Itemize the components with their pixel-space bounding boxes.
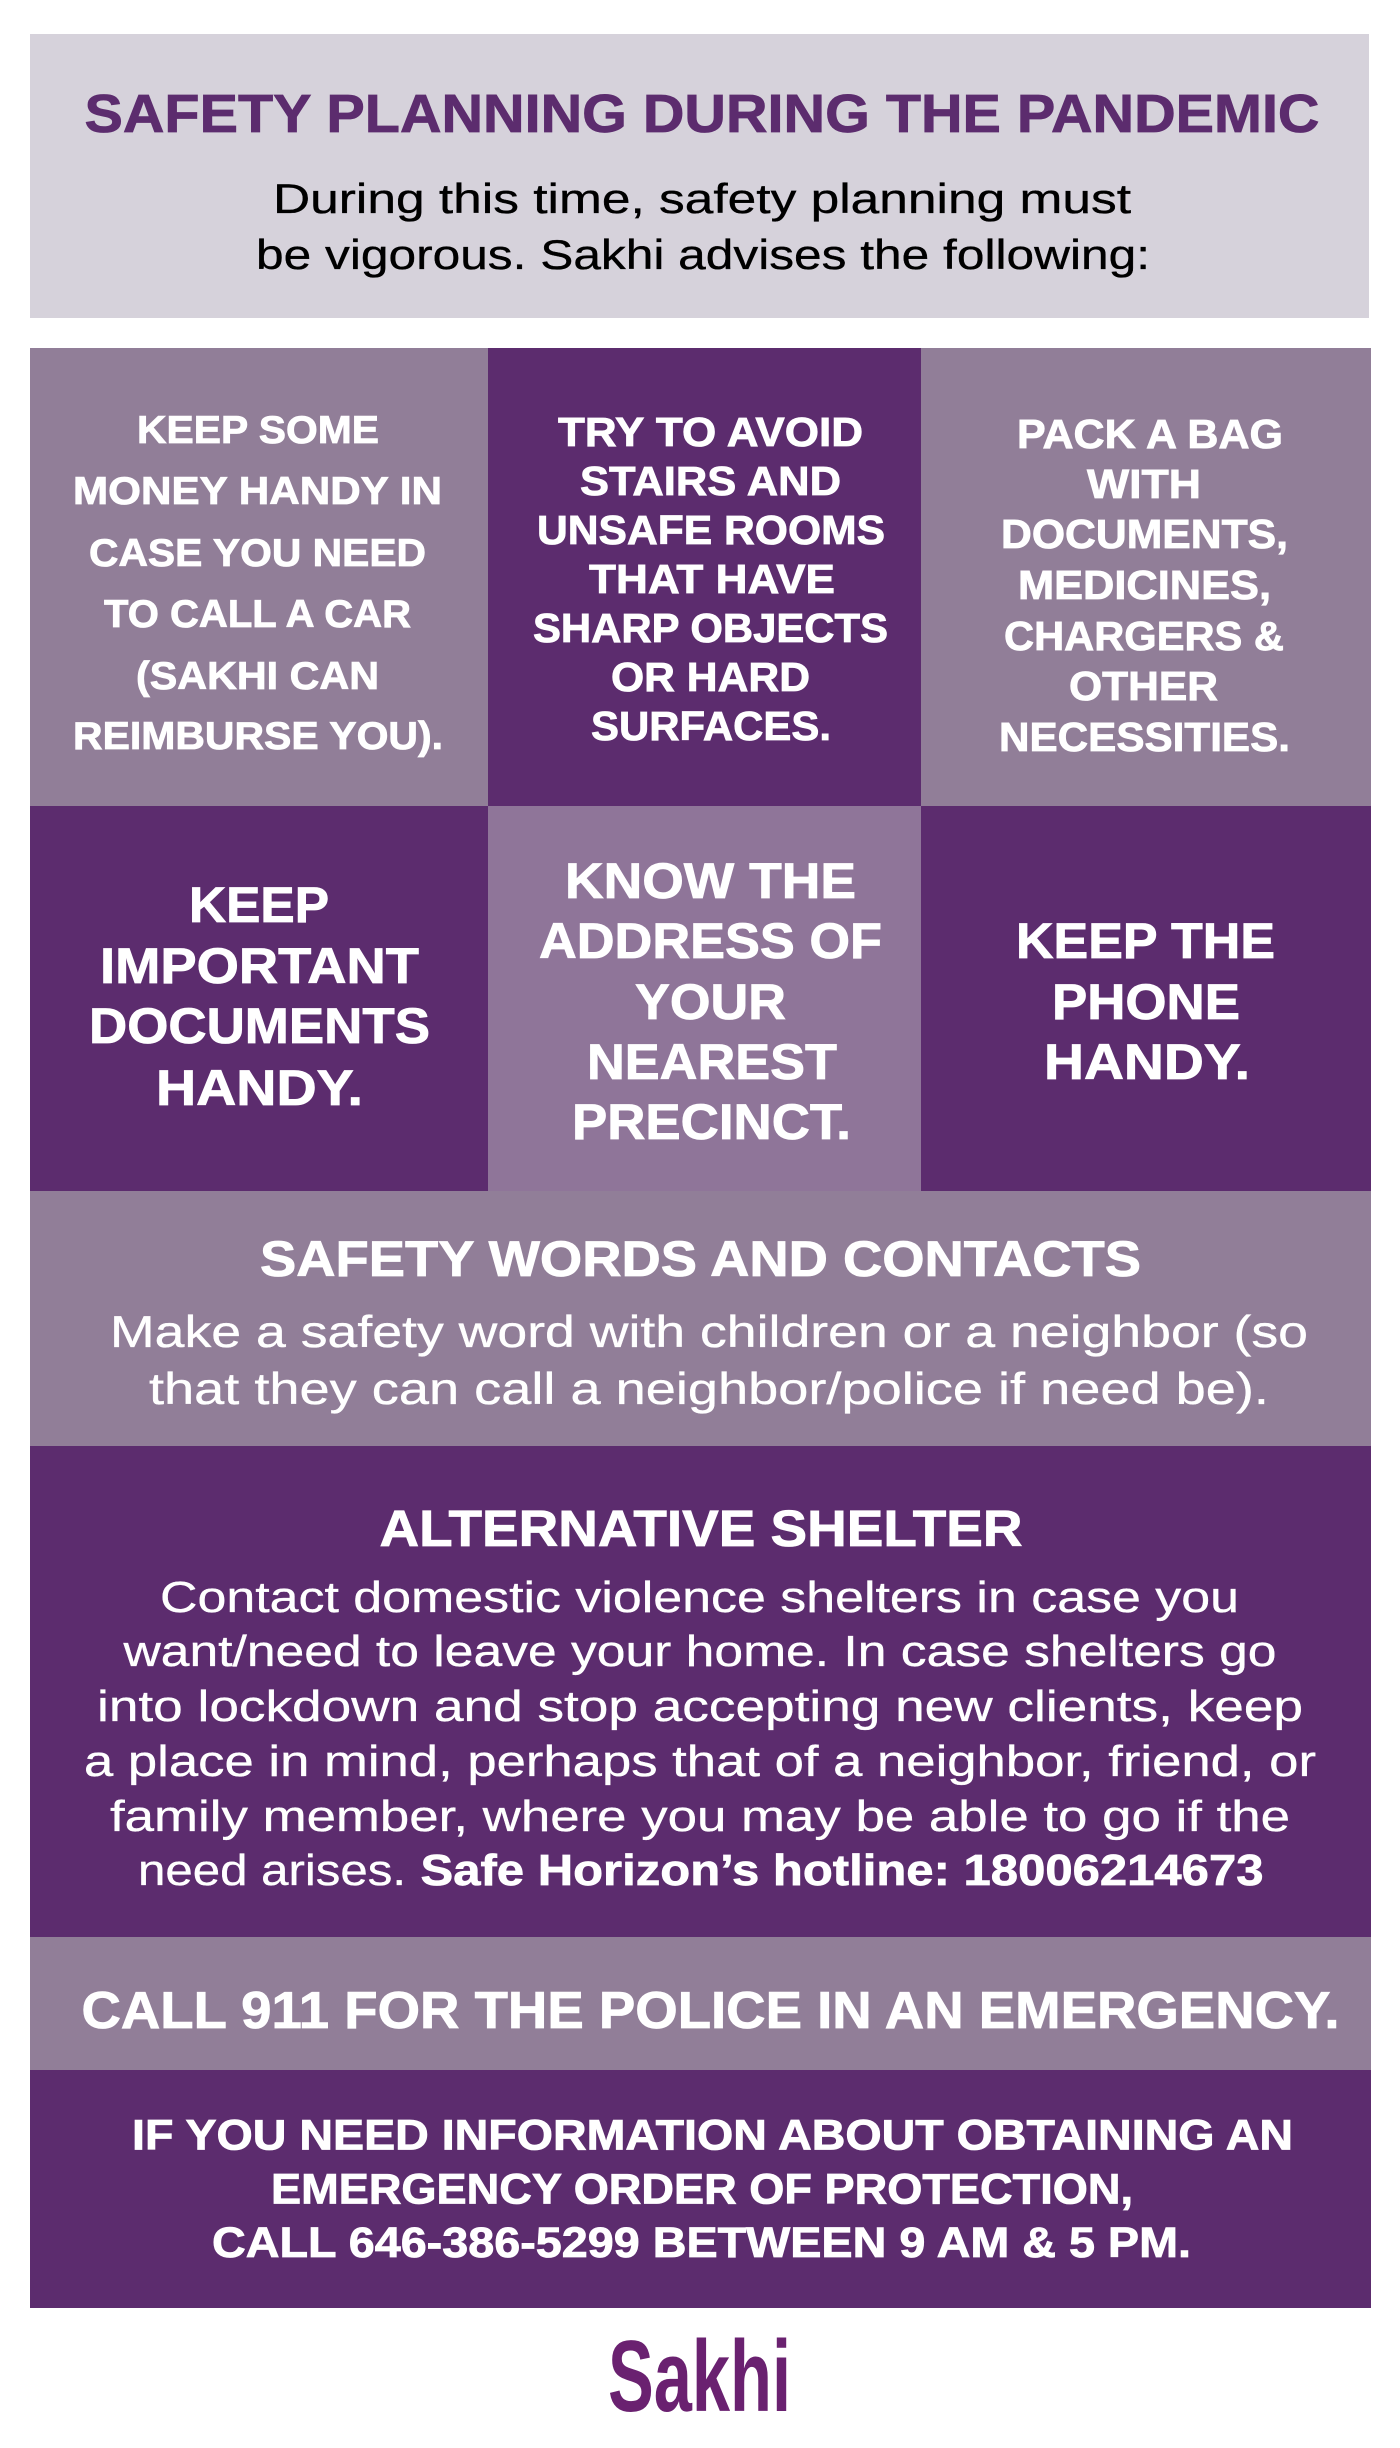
text block: shelter advice: a place in mind, perhaps that of a neighbor, friend, or [84,1737,1316,1786]
panel: avoid stairs [488,348,921,806]
text block: shelter advice: Contact domestic violence shelters in case you [160,1573,1239,1622]
tip text: precinct: PRECINCT. [572,1093,851,1150]
panel: order of protection [30,2070,1371,2308]
tip text: documents [89,876,430,1116]
tip text: precinct [539,852,882,1150]
tip text: bag: DOCUMENTS, [1001,511,1288,557]
tip text: documents: HANDY. [156,1059,363,1116]
tip text: documents: KEEP [189,876,329,933]
tip text: money: (SAKHI CAN [136,655,379,698]
text block: shelter advice: into lockdown and stop accepting new clients, keep [97,1682,1303,1731]
panel: call 911 [30,1937,1371,2070]
callout: call 911: CALL 911 FOR THE POLICE IN AN EMERGENCY. [82,1982,1339,2040]
tip text: precinct: KNOW THE [565,852,856,909]
text block: order of protection: CALL 646-386-5299 BETWEEN 9 AM & 5 PM. [212,2220,1191,2267]
tip text: stairs: THAT HAVE [589,556,835,602]
tip text: bag: NECESSITIES. [999,714,1290,760]
tip text: precinct: ADDRESS OF [539,912,882,969]
panel: know nearest precinct [488,806,921,1191]
tip text: stairs: OR HARD [611,654,810,700]
text block: shelter advice: Safe Horizon’s hotline: 18006214673 [420,1846,1264,1895]
heading: alternative shelter: ALTERNATIVE SHELTER [380,1500,1022,1557]
tip text: stairs: SHARP OBJECTS [533,605,888,651]
tip text: precinct: NEAREST [587,1033,837,1090]
panel: keep documents handy [30,806,488,1191]
tip text: phone [1016,912,1275,1090]
tip text: bag: WITH [1087,461,1201,507]
tip text: stairs: UNSAFE ROOMS [537,507,885,553]
text block: order of protection: IF YOU NEED INFORMATION ABOUT OBTAINING AN [132,2112,1293,2160]
text block: shelter advice: family member, where you may be able to go if the [110,1792,1290,1841]
tip text: bag: OTHER [1069,663,1218,709]
tip text: money: MONEY HANDY IN [73,470,442,513]
heading: safety words: SAFETY WORDS AND CONTACTS [260,1231,1141,1287]
text block: shelter advice: need arises. [138,1846,406,1895]
text block: shelter advice [84,1573,1316,1895]
text block: order of protection: EMERGENCY ORDER OF PROTECTION, [271,2166,1133,2214]
tip text: bag: PACK A BAG [1017,411,1283,457]
tip text: phone: PHONE [1052,973,1240,1030]
tip text: stairs [533,409,888,749]
tip text: money: KEEP SOME [137,409,379,452]
text block: order of protection [132,2112,1293,2267]
tip text: money: TO CALL A CAR [104,593,411,636]
panel: safety words and contacts [30,1191,1371,1446]
text block: safety words: that they can call a neighbor/police if need be). [149,1365,1269,1414]
tip text: phone: HANDY. [1044,1033,1250,1090]
intro text [256,175,1150,278]
text block: shelter advice: want/need to leave your home. In case shelters go [122,1627,1276,1676]
tip text: stairs: STAIRS AND [580,458,841,504]
panel: keep money handy [30,348,488,806]
tip text: documents: IMPORTANT [100,937,419,994]
tip text: precinct: YOUR [635,973,786,1030]
tip text: stairs: SURFACES. [591,703,831,749]
tip text: bag [999,411,1290,760]
text block: safety words: Make a safety word with children or a neighbor (so [110,1308,1308,1357]
intro text: During this time, safety planning must [273,175,1131,222]
panel: header [30,34,1369,318]
panel: pack a bag [921,348,1371,806]
tip text: money: REIMBURSE YOU). [73,715,443,758]
tip text: money [73,409,443,758]
panel: keep phone handy [921,806,1371,1191]
tip text: bag: MEDICINES, [1018,562,1271,608]
tip text: bag: CHARGERS & [1004,613,1284,659]
title: SAFETY PLANNING DURING THE PANDEMIC [84,84,1320,144]
tip text: phone: KEEP THE [1016,912,1275,969]
tip text: stairs: TRY TO AVOID [558,409,863,455]
intro text: be vigorous. Sakhi advises the following: [256,231,1150,278]
tip text: money: CASE YOU NEED [89,532,426,575]
tip text: documents: DOCUMENTS [89,997,430,1054]
logo: Sakhi: Sakhi [608,2321,791,2433]
text block: safety words [110,1308,1308,1414]
panel: alternative shelter [30,1446,1371,1937]
